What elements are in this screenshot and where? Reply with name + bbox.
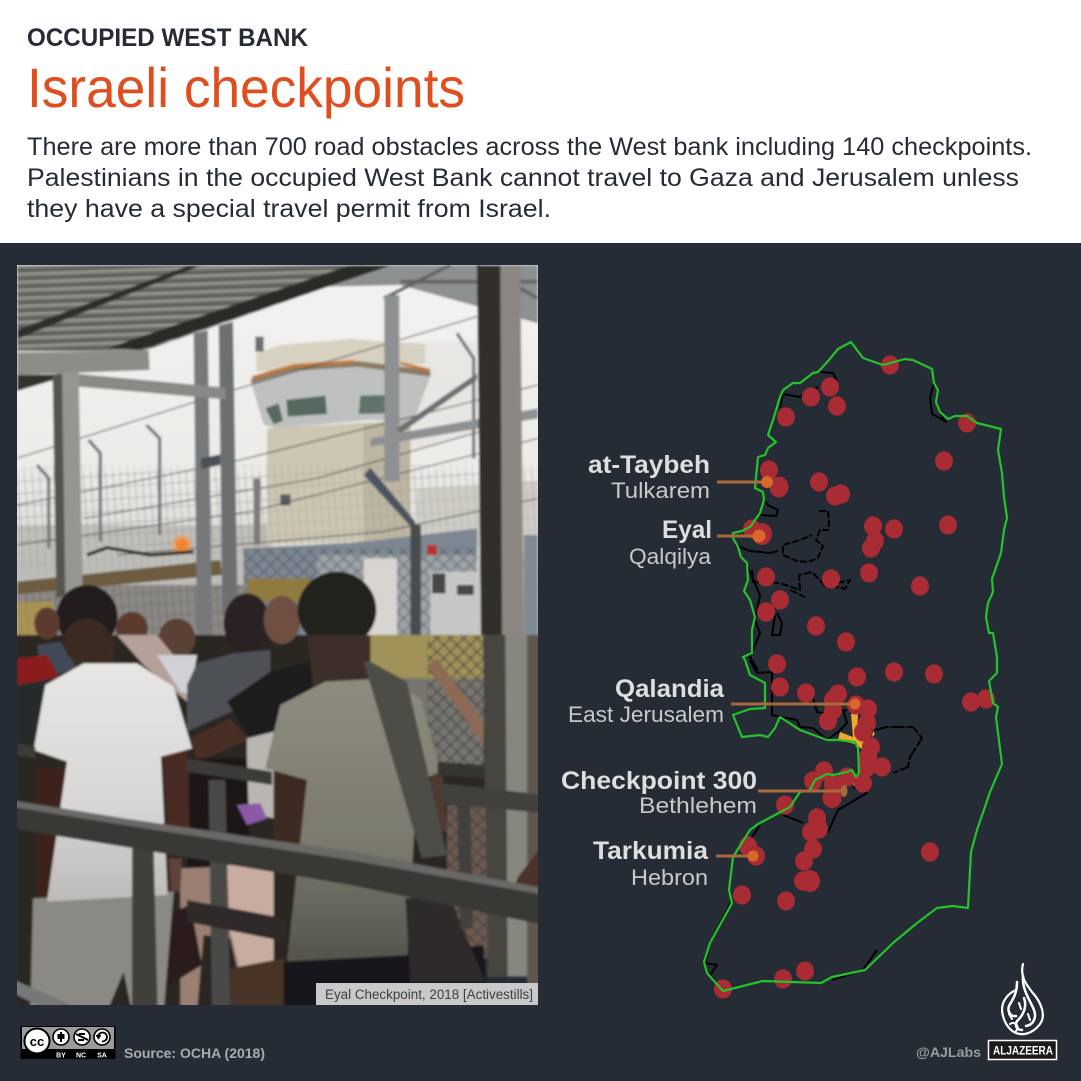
intro text: Palestinians in the occupied West Bank cannot travel to Gaza and Jerusalem unless: [27, 164, 1019, 192]
checkpoint dots: [714, 355, 995, 999]
icon: creative commons badge: NC: [76, 1052, 86, 1060]
header panel: [0, 0, 1081, 243]
crowd, lower photo: [17, 635, 545, 1012]
callout: at-Taybeh: Tulkarem: [611, 478, 710, 503]
callout: Eyal: [629, 516, 766, 569]
AJLabs handle: @AJLabs: [916, 1044, 981, 1060]
callout: Tarkumia: [593, 837, 758, 890]
callout: at-Taybeh: at-Taybeh: [588, 451, 710, 479]
man in khaki t-shirt with bag: [265, 572, 487, 1012]
callout: at-Taybeh: [588, 451, 773, 503]
callout: Tarkumia: Tarkumia: [593, 837, 709, 865]
title: Israeli checkpoints: [27, 56, 465, 119]
icon: Al Jazeera logo: ALJAZEERA: [993, 1046, 1053, 1058]
trousers of pale figure: [178, 866, 240, 1005]
icon: creative commons badge: BY: [56, 1052, 66, 1060]
canopy: [17, 265, 538, 482]
watchtower: [250, 337, 430, 543]
icon: creative commons badge: cc: [30, 1034, 44, 1049]
intro text: they have a special travel permit from Israel.: [27, 195, 551, 223]
heads at rear: [17, 585, 300, 745]
callout: Eyal: Qalqilya: [629, 544, 712, 569]
photo: Eyal checkpoint: [10, 258, 545, 1012]
callout: Qalandia: [568, 675, 860, 727]
intro text: There are more than 700 road obstacles across the West bank including 140 checkpoints.: [27, 133, 1032, 161]
map of the West Bank: [704, 342, 1007, 999]
eyebrow heading: OCCUPIED WEST BANK: [27, 24, 308, 52]
icon: Al Jazeera logo: [988, 964, 1056, 1060]
callout: Qalandia: East Jerusalem: [568, 702, 724, 727]
icon: creative commons badge: SA: [97, 1052, 107, 1060]
callout: Checkpoint 300: Checkpoint 300: [561, 767, 757, 795]
source: Source: OCHA (2018): [124, 1045, 265, 1061]
green line: [704, 342, 1007, 991]
background: [0, 243, 1081, 1081]
man in grey shirt and black shirt: [187, 650, 312, 868]
barrier route: [705, 372, 947, 990]
icon: creative commons badge: [20, 1026, 116, 1060]
callout: Checkpoint 300: Bethlehem: [639, 793, 757, 818]
photo caption: Eyal Checkpoint, 2018 [Activestills]: [325, 987, 533, 1002]
photo caption: [316, 983, 538, 1005]
man in white t-shirt: [30, 618, 192, 1012]
callout: Eyal: Eyal: [662, 516, 712, 544]
callout: Qalandia: Qalandia: [615, 675, 725, 703]
intro text: [27, 133, 1032, 223]
callout: Checkpoint 300: [561, 767, 848, 818]
railings: [10, 743, 545, 1012]
warning light: [87, 535, 194, 555]
callout: Tarkumia: Hebron: [631, 865, 708, 890]
steel posts: [53, 265, 524, 635]
lower gate structures: [17, 468, 538, 635]
Jerusalem area fill: [838, 714, 875, 789]
